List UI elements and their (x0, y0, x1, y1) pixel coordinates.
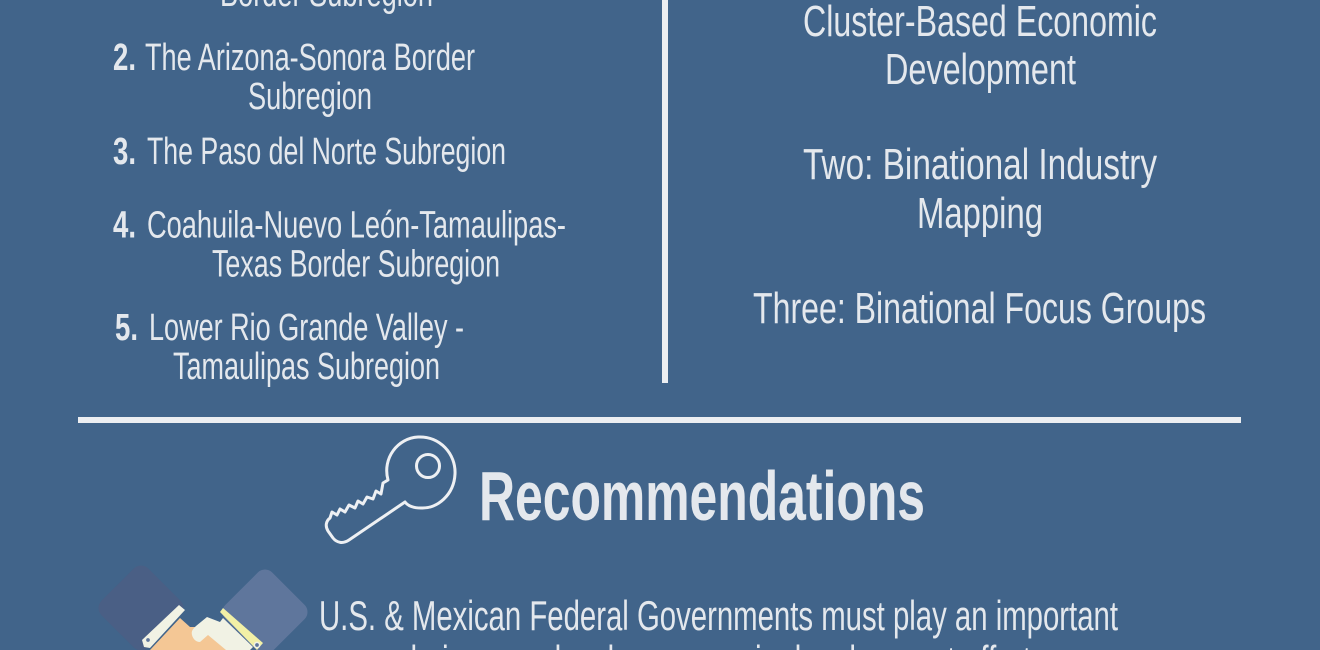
method two (803, 140, 1157, 238)
right hand (192, 617, 253, 650)
panel: methods list (753, 0, 1206, 333)
item 4: 4. (113, 204, 136, 246)
method two: Two: Binational Industry (803, 140, 1157, 189)
item 5: Lower Rio Grande Valley - (149, 307, 464, 349)
item 5: 5. (115, 307, 138, 349)
left cuff (142, 605, 185, 648)
item 4: Texas Border Subregion (212, 244, 500, 286)
left hand (150, 618, 236, 650)
item 3: 3. (113, 131, 136, 173)
horizontal divider (78, 417, 1241, 423)
item 3 (113, 131, 506, 173)
method one: Development (885, 45, 1076, 94)
item 3: The Paso del Norte Subregion (147, 131, 506, 173)
right sleeve (218, 565, 312, 650)
item 4: Coahuila-Nuevo León-Tamaulipas- (147, 204, 566, 246)
vertical divider (662, 0, 668, 383)
left sleeve (94, 561, 188, 650)
icon: handshake (94, 561, 312, 650)
method two: Mapping (917, 189, 1043, 238)
right cuff (220, 608, 263, 650)
item 4 (113, 204, 566, 286)
method one (803, 0, 1157, 94)
panel: subregions list (113, 0, 566, 388)
item 2 (113, 37, 475, 118)
item 2: 2. (113, 37, 136, 79)
item 2: The Arizona-Sonora Border (145, 37, 475, 79)
heading: Recommendations: Recommendations (479, 457, 925, 535)
item 5 (115, 307, 464, 388)
icon: key (326, 437, 455, 542)
item 5: Tamaulipas Subregion (173, 346, 440, 388)
recommendation text (319, 592, 1118, 650)
cuff buttons (145, 637, 260, 648)
item 2: Subregion (248, 76, 372, 118)
